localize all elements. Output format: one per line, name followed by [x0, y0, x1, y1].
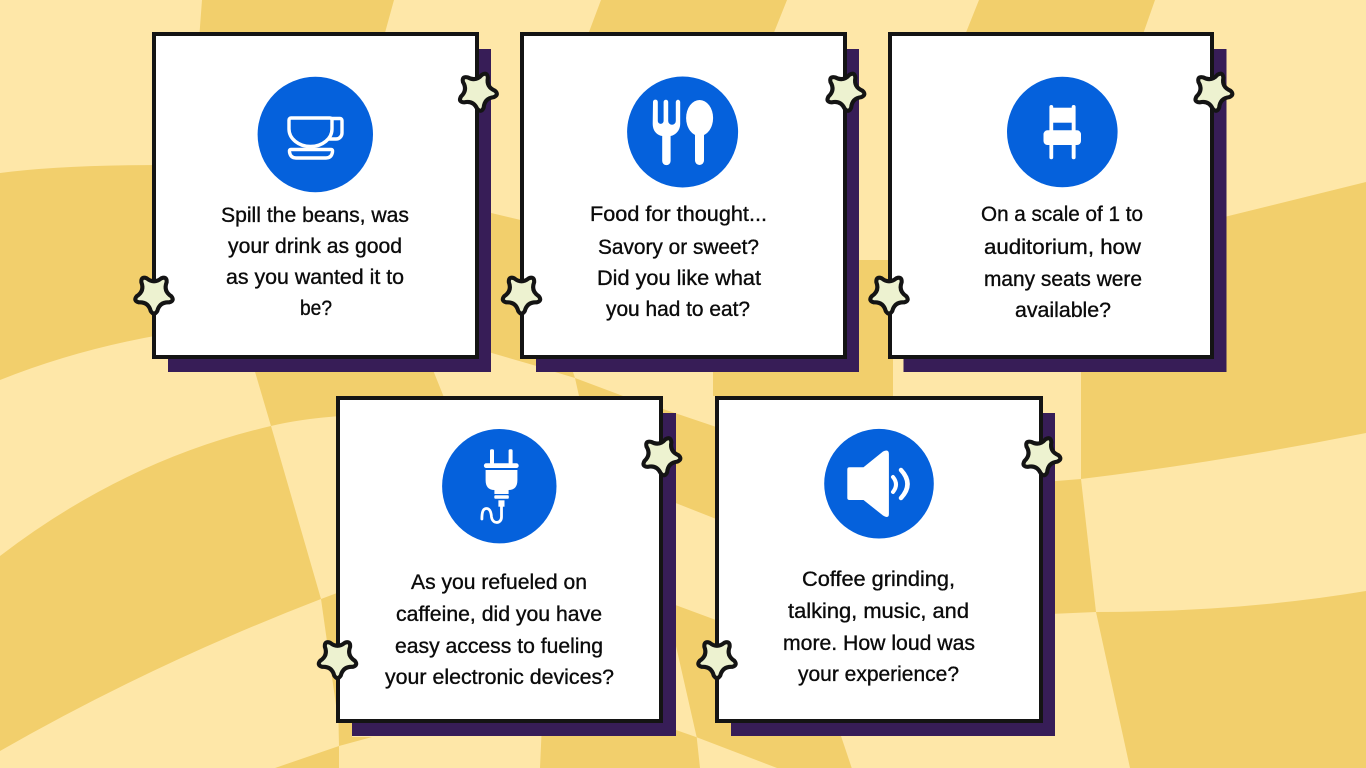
star: upper right	[456, 72, 499, 114]
panel: seating question	[890, 34, 1235, 372]
star: upper right	[824, 72, 867, 114]
text: food question: Savory or sweet?	[598, 236, 759, 259]
star: card 3 lower left	[870, 278, 908, 314]
panel: food question	[522, 34, 867, 372]
icon: chair	[1007, 77, 1118, 187]
text: power outlet question	[385, 571, 614, 689]
text: power outlet question: As you refueled on	[411, 571, 587, 594]
text: drink question: as you wanted it to	[226, 266, 404, 289]
text: power outlet question: caffeine, did you have	[396, 603, 602, 626]
text: noise question: talking, music, and	[788, 600, 969, 623]
text: seating question: On a scale of 1 to	[981, 203, 1143, 226]
panel: power outlet question	[338, 398, 683, 736]
text: drink question: Spill the beans, was	[221, 204, 409, 227]
text: seating question	[981, 203, 1143, 322]
text: power outlet question: your electronic devices?	[385, 666, 614, 689]
text: seating question: available?	[1015, 299, 1111, 322]
star: upper right	[1020, 437, 1063, 479]
icon: coffee cup	[258, 77, 373, 192]
text: drink question: your drink as good	[228, 235, 402, 258]
panel: drink question	[154, 34, 499, 372]
text: noise question: more. How loud was	[783, 632, 975, 655]
text: food question	[590, 203, 767, 321]
text: drink question: be?	[300, 297, 332, 320]
star: upper right	[1192, 72, 1235, 114]
icon: electric plug	[442, 429, 556, 543]
text: food question: Food for thought...	[590, 203, 767, 226]
text: seating question: many seats were	[984, 268, 1142, 291]
star: card 4 lower left	[319, 642, 356, 678]
text: seating question: auditorium, how	[984, 236, 1142, 259]
star: card 5 lower left	[698, 642, 736, 678]
text: drink question	[221, 204, 409, 320]
text: food question: you had to eat?	[606, 298, 750, 321]
text: noise question: your experience?	[798, 663, 959, 686]
star: card 2 lower left	[503, 278, 540, 314]
text: food question: Did you like what	[597, 267, 761, 290]
icon: speaker	[824, 429, 934, 538]
panel: noise question	[717, 398, 1063, 736]
star: upper right	[640, 437, 683, 479]
star: card 1 lower left	[135, 278, 173, 314]
icon: fork and spoon	[627, 76, 738, 188]
text: power outlet question: easy access to fueling	[395, 635, 603, 658]
text: noise question: Coffee grinding,	[802, 568, 955, 591]
text: noise question	[783, 568, 975, 686]
